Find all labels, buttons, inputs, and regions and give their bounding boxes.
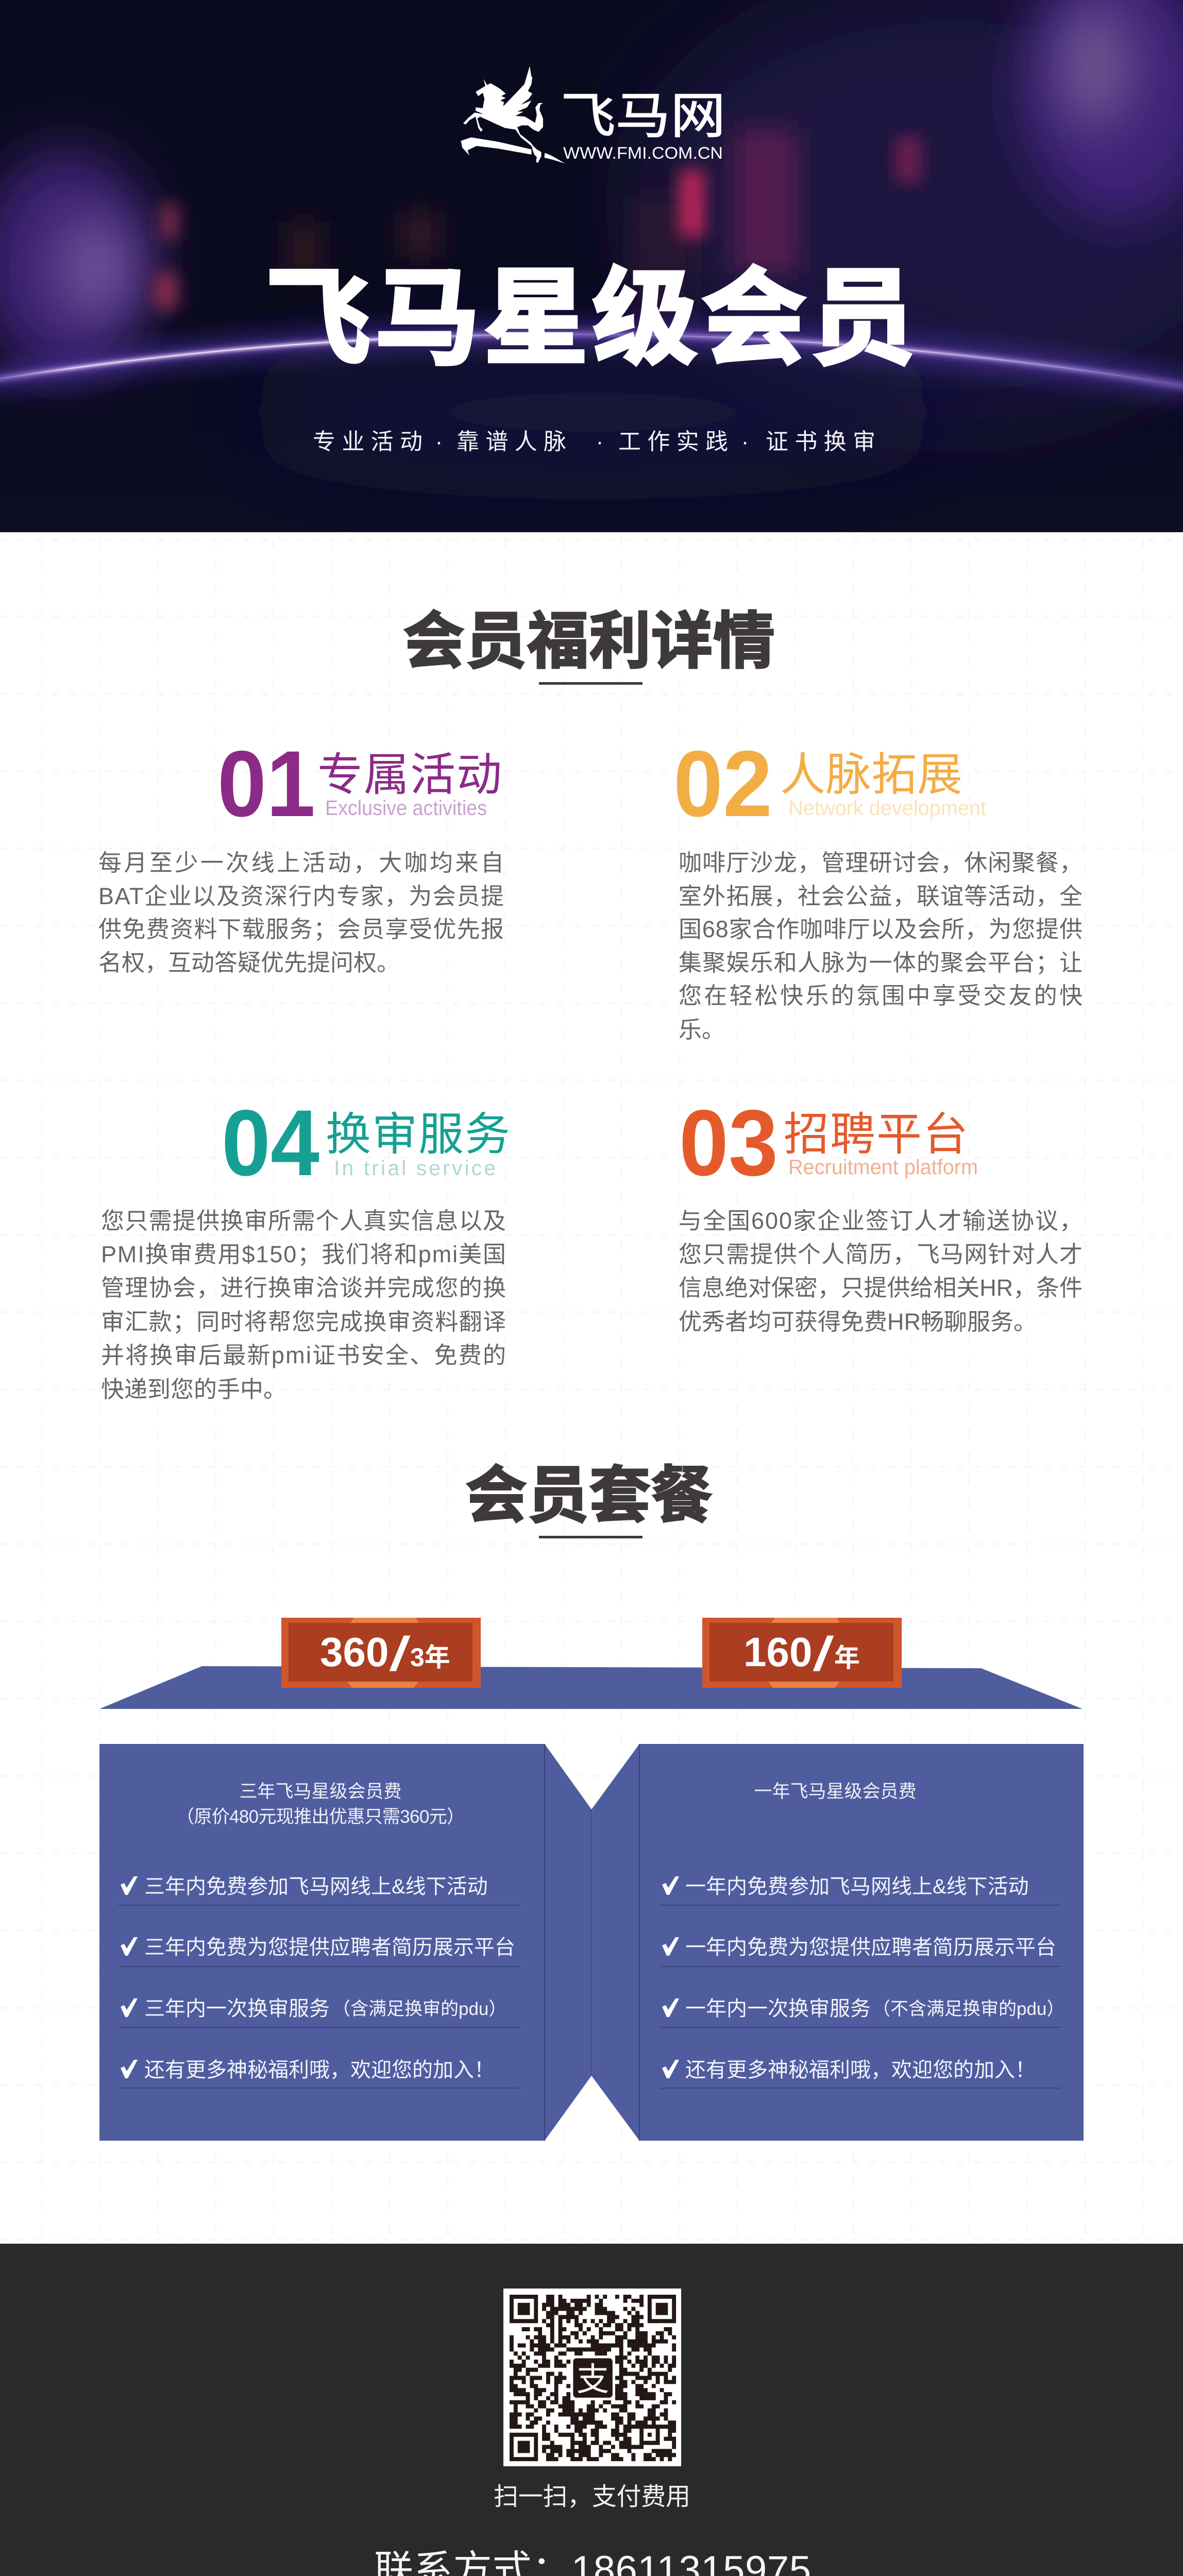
heading: membership packages: 会员套餐 bbox=[465, 1461, 713, 1530]
price badge: three years: / bbox=[390, 1628, 410, 1681]
price badge: one year: 年 bbox=[834, 1643, 860, 1672]
tagline: 工作实践 bbox=[618, 429, 728, 454]
one-year plan title: 一年飞马星级会员费 bbox=[754, 1782, 917, 1802]
benefit 04 text: 您只需提供换审所需个人真实信息以及 bbox=[101, 1208, 506, 1234]
logo bbox=[461, 66, 725, 163]
price shelf bbox=[99, 1666, 1083, 1709]
benefit 01 title: 专属活动 bbox=[317, 749, 502, 800]
one-year plan list: 一年内一次换审服务 bbox=[685, 1997, 871, 2020]
three-year plan list: 三年内免费参加飞马网线上&线下活动 bbox=[144, 1875, 488, 1898]
three-year plan title bbox=[176, 1782, 465, 1827]
benefit 04 text: 审汇款；同时将帮您完成换审资料翻译 bbox=[101, 1309, 506, 1335]
panel: benefit 04 bbox=[101, 1090, 510, 1402]
benefit 03 text: 优秀者均可获得免费HR畅聊服务。 bbox=[679, 1309, 1037, 1335]
number 01: 01 bbox=[217, 731, 315, 836]
benefit 03 text: 与全国600家企业签订人才输送协议， bbox=[679, 1208, 1083, 1234]
panel: three-year plan bbox=[99, 1744, 592, 2141]
benefit 03 text: 您只需提供个人简历，飞马网针对人才 bbox=[679, 1241, 1083, 1267]
three-year plan list: 三年内免费为您提供应聘者简历展示平台 bbox=[144, 1936, 515, 1959]
three-year plan title: （原价480元现推出优惠只需360元） bbox=[176, 1807, 465, 1827]
footer bbox=[0, 2244, 1183, 2576]
price badge: one year: 160 bbox=[743, 1629, 812, 1675]
price badge: three years bbox=[281, 1618, 481, 1688]
benefit 01 subtitle: Exclusive activities bbox=[325, 796, 487, 820]
tagline: · bbox=[596, 429, 603, 454]
benefit 03 title: 招聘平台 bbox=[784, 1109, 968, 1160]
logo url: WWW.FMI.COM.CN bbox=[563, 144, 723, 162]
icon: alipay: 支 bbox=[577, 2362, 609, 2398]
hero background bbox=[0, 0, 1183, 532]
one-year plan list: 一年内免费为您提供应聘者简历展示平台 bbox=[685, 1936, 1056, 1959]
QR code bbox=[503, 2289, 681, 2466]
benefit 04 text: 快递到您的手中。 bbox=[101, 1376, 286, 1402]
benefit 04 subtitle: In trial service bbox=[334, 1156, 496, 1180]
one-year plan list bbox=[660, 1875, 1064, 2088]
benefit 03 text bbox=[679, 1208, 1083, 1335]
benefit 02 text: 乐。 bbox=[679, 1016, 725, 1043]
number 03: 03 bbox=[679, 1090, 778, 1195]
benefit 01 text bbox=[98, 850, 504, 976]
benefit 04 text: PMI换审费用$150；我们将和pmi美国 bbox=[101, 1241, 506, 1267]
number 04: 04 bbox=[222, 1090, 319, 1195]
panel: benefit 03 bbox=[679, 1090, 1083, 1335]
icon: pegasus bbox=[461, 66, 565, 163]
heading: member benefits: 会员福利详情 bbox=[403, 607, 775, 676]
benefit 01 text: BAT企业以及资深行内专家，为会员提 bbox=[98, 883, 504, 909]
benefit 02 title: 人脉拓展 bbox=[780, 749, 962, 800]
price badge: three years: 360 bbox=[320, 1629, 388, 1675]
horizon arc bbox=[0, 334, 1183, 387]
price badge: one year bbox=[702, 1618, 902, 1688]
panel: benefit 01 bbox=[98, 731, 504, 976]
benefit 03 text: 信息绝对保密，只提供给相关HR，条件 bbox=[679, 1275, 1083, 1301]
benefit 02 text: 集聚娱乐和人脉为一体的聚会平台；让 bbox=[679, 950, 1083, 976]
tagline: · bbox=[741, 429, 749, 454]
benefit 04 text: 并将换审后最新pmi证书安全、免费的 bbox=[101, 1342, 506, 1368]
three-year plan title: 三年飞马星级会员费 bbox=[239, 1782, 402, 1802]
hero banner bbox=[0, 0, 1183, 532]
three-year plan list: 还有更多神秘福利哦，欢迎您的加入！ bbox=[144, 2059, 495, 2081]
benefit 02 text: 咖啡厅沙龙，管理研讨会，休闲聚餐， bbox=[679, 850, 1083, 876]
title: 飞马星级会员 bbox=[265, 260, 916, 378]
benefit 04 text bbox=[101, 1208, 506, 1402]
tagline: · bbox=[435, 429, 443, 454]
benefit 02 text bbox=[679, 850, 1083, 1043]
panel: benefit 02 bbox=[673, 731, 1083, 1043]
three-year plan list: （含满足换审的pdu） bbox=[332, 1999, 506, 2019]
tagline: 证书换审 bbox=[766, 429, 875, 454]
benefit 04 text: 管理协会，进行换审洽谈并完成您的换 bbox=[101, 1275, 506, 1301]
benefit 02 text: 国68家合作咖啡厅以及会所，为您提供 bbox=[679, 916, 1083, 942]
panel: one-year plan bbox=[592, 1744, 1084, 2141]
tagline bbox=[313, 429, 875, 454]
logo wordmark: 飞马网 bbox=[561, 89, 725, 144]
benefit 02 text: 您在轻松快乐的氛围中享受交友的快 bbox=[679, 982, 1083, 1009]
one-year plan list: 还有更多神秘福利哦，欢迎您的加入！ bbox=[685, 2059, 1036, 2081]
benefit 01 text: 供免费资料下载服务；会员享受优先报 bbox=[98, 916, 504, 942]
tagline: 靠谱人脉 bbox=[457, 429, 566, 454]
price badge: three years: 3年 bbox=[410, 1643, 450, 1672]
one-year plan list: 一年内免费参加飞马网线上&线下活动 bbox=[685, 1875, 1029, 1898]
three-year plan list: 三年内一次换审服务 bbox=[144, 1997, 330, 2020]
benefit 02 subtitle: Network development bbox=[788, 796, 987, 820]
benefit 01 text: 名权，互动答疑优先提问权。 bbox=[98, 950, 400, 976]
benefit 01 text: 每月至少一次线上活动，大咖均来自 bbox=[98, 850, 504, 876]
tagline: 专业活动 bbox=[313, 429, 422, 454]
benefit 04 title: 换审服务 bbox=[326, 1109, 510, 1160]
price badge: one year: / bbox=[814, 1628, 834, 1681]
three-year plan list bbox=[119, 1875, 519, 2088]
number 02: 02 bbox=[673, 731, 772, 836]
benefit 02 text: 室外拓展，社会公益，联谊等活动，全 bbox=[679, 883, 1083, 909]
scan caption: 扫一扫，支付费用 bbox=[494, 2483, 690, 2511]
benefit 03 subtitle: Recruitment platform bbox=[788, 1155, 978, 1179]
one-year plan list: （不含满足换审的pdu） bbox=[872, 1999, 1064, 2019]
